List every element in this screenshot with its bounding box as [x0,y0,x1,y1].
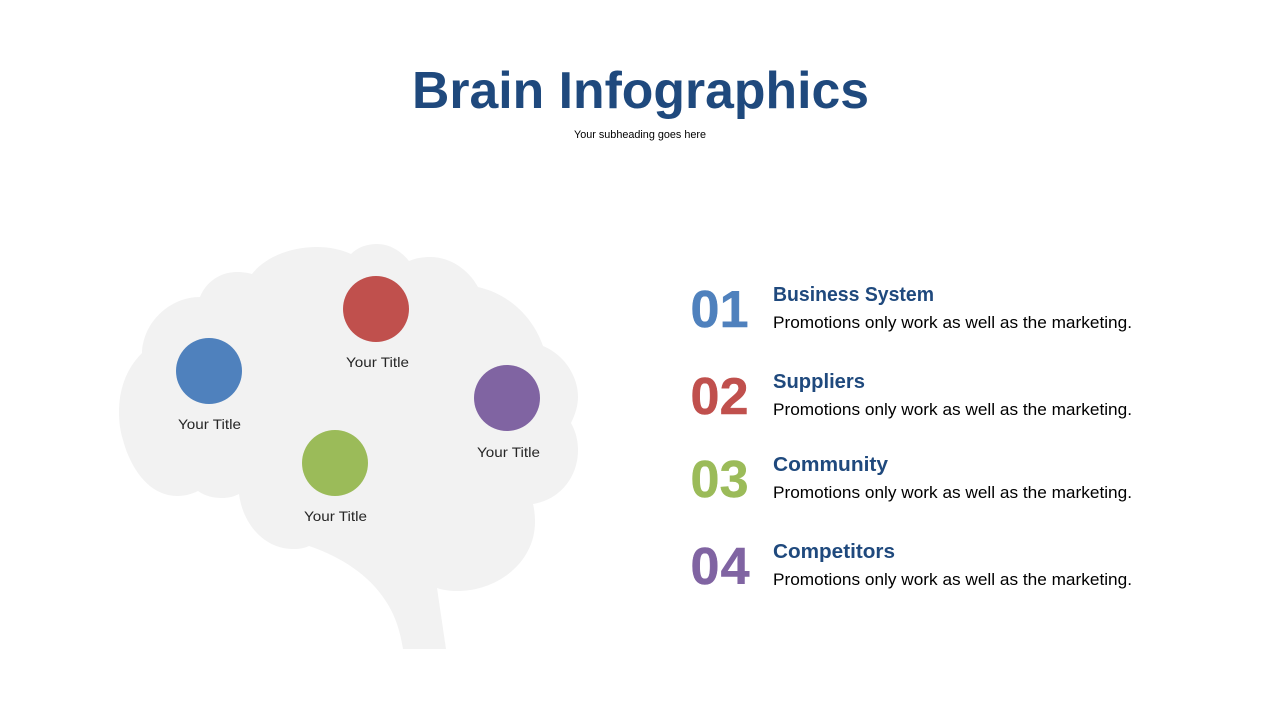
list item 02: Suppliers [773,371,865,393]
list item 04: Promotions only work as well as the marketing. [773,570,1132,589]
list item 01: Business System [773,284,934,306]
list item 03 [690,451,1132,509]
node: purple: Your Title [477,444,540,460]
list item 03: Community [773,454,889,476]
node: blue: Your Title [178,416,241,432]
list item 02: 02 [690,368,748,426]
list item 02 [690,368,1132,426]
list item 04: Competitors [773,541,895,563]
list item 03: Promotions only work as well as the marketing. [773,483,1132,502]
list item 03: 03 [690,451,748,509]
list item 02: Promotions only work as well as the marketing. [773,400,1132,419]
node: green: Your Title [304,508,367,524]
list item 01: 01 [690,281,748,339]
list item 01 [690,281,1132,339]
list item 04 [690,538,1132,596]
node: red [343,276,409,370]
brain diagram [119,244,578,649]
node: red: Your Title [346,354,409,370]
brain silhouette [119,244,578,649]
list item 04: 04 [690,538,750,596]
list item 01: Promotions only work as well as the marketing. [773,313,1132,332]
node: purple [474,365,540,460]
node: blue [176,338,242,432]
node: green [302,430,368,524]
title: Brain Infographics [412,62,869,120]
subheading: Your subheading goes here [574,129,706,141]
